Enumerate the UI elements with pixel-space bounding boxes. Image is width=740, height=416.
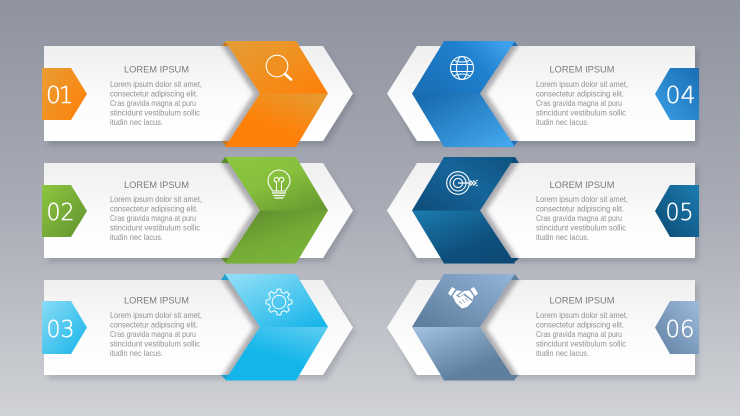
body text 04: consectetur adipiscing elit. — [536, 88, 624, 98]
body text 01: stincidunt vestibulum sollic — [110, 108, 200, 118]
card 02 — [42, 157, 355, 264]
fold triangles 03 — [221, 274, 231, 380]
body text 05 — [536, 194, 628, 242]
fold triangles 06 — [509, 274, 519, 380]
chevron 04 — [412, 41, 515, 147]
body text 03 — [110, 310, 202, 358]
number 03: 03 — [46, 315, 74, 343]
chevron 06 — [412, 274, 515, 380]
number 02: 02 — [46, 198, 74, 226]
body text 03: Lorem ipsum dolor sit amet, — [110, 310, 202, 320]
body text 03: stincidunt vestibulum sollic — [110, 338, 200, 348]
badge 05 — [655, 185, 699, 237]
fold triangles 05 — [509, 157, 519, 263]
body text 03: itudin nec lacus. — [110, 348, 163, 358]
chevron 02 — [225, 157, 328, 264]
body text 06: stincidunt vestibulum sollic — [536, 338, 626, 348]
badge 06 — [655, 301, 699, 354]
heading 04: LOREM IPSUM — [550, 64, 615, 76]
body text 06: Lorem ipsum dolor sit amet, — [536, 310, 628, 320]
heading 06: LOREM IPSUM — [550, 296, 615, 306]
number 06: 06 — [666, 315, 694, 343]
fold triangles 04 — [509, 41, 518, 146]
body text 01: Cras gravida magna at puru — [110, 98, 196, 108]
body text 04 — [536, 79, 628, 127]
badge 01 — [42, 68, 87, 120]
heading 01: LOREM IPSUM — [124, 64, 189, 76]
fold triangles 02 — [221, 157, 231, 263]
body text 02: Lorem ipsum dolor sit amet, — [110, 194, 202, 204]
body text 04: Cras gravida magna at puru — [536, 98, 622, 108]
body text 06: consectetur adipiscing elit. — [536, 320, 624, 330]
body text 01 — [110, 79, 202, 127]
body text 06 — [536, 310, 628, 358]
icon: handshake — [448, 287, 478, 308]
chevron 05 — [412, 157, 515, 264]
badge 02 — [42, 185, 87, 237]
body text 01: consectetur adipiscing elit. — [110, 88, 198, 98]
chevron 03 — [225, 274, 328, 380]
icon: light bulb — [268, 170, 290, 198]
icon: gear — [266, 289, 292, 315]
panel 03 — [44, 280, 353, 375]
card 06 — [387, 274, 699, 381]
number 04: 04 — [666, 81, 696, 109]
body text 02: consectetur adipiscing elit. — [110, 204, 198, 214]
badge 04 — [655, 68, 699, 120]
icon: magnifying glass — [266, 55, 291, 80]
body text 02: stincidunt vestibulum sollic — [110, 222, 200, 232]
body text 05: Lorem ipsum dolor sit amet, — [536, 194, 628, 204]
panel 01 — [44, 46, 353, 141]
body text 02: Cras gravida magna at puru — [110, 213, 196, 223]
body text 06: Cras gravida magna at puru — [536, 329, 622, 339]
heading 03: LOREM IPSUM — [124, 296, 189, 306]
fold triangles 01 — [222, 41, 231, 146]
body text 05: itudin nec lacus. — [536, 232, 589, 242]
icon: target with arrow — [447, 172, 478, 194]
panel 05 — [387, 163, 695, 258]
card 04 — [387, 41, 699, 147]
body text 02: itudin nec lacus. — [110, 232, 163, 242]
heading 02: LOREM IPSUM — [124, 180, 189, 191]
panel 02 — [44, 163, 353, 258]
panel 06 — [387, 280, 695, 375]
body text 05: stincidunt vestibulum sollic — [536, 222, 626, 232]
body text 05: Cras gravida magna at puru — [536, 213, 622, 223]
body text 03: consectetur adipiscing elit. — [110, 320, 198, 330]
card 05 — [387, 157, 699, 264]
body text 04: stincidunt vestibulum sollic — [536, 108, 626, 118]
body text 01: itudin nec lacus. — [110, 117, 163, 127]
icon: globe — [450, 56, 474, 80]
card 01 — [42, 41, 355, 147]
body text 06: itudin nec lacus. — [536, 348, 589, 358]
body text 04: itudin nec lacus. — [536, 117, 589, 127]
card 03 — [42, 274, 355, 381]
panel 04 — [387, 46, 695, 141]
number 05: 05 — [666, 198, 694, 226]
body text 03: Cras gravida magna at puru — [110, 329, 196, 339]
badge 03 — [42, 301, 87, 354]
body text 02 — [110, 194, 202, 242]
chevron 01 — [225, 41, 328, 147]
heading 05: LOREM IPSUM — [550, 180, 615, 191]
body text 01: Lorem ipsum dolor sit amet, — [110, 79, 202, 89]
body text 05: consectetur adipiscing elit. — [536, 204, 624, 214]
body text 04: Lorem ipsum dolor sit amet, — [536, 79, 628, 89]
number 01: 01 — [46, 81, 73, 109]
